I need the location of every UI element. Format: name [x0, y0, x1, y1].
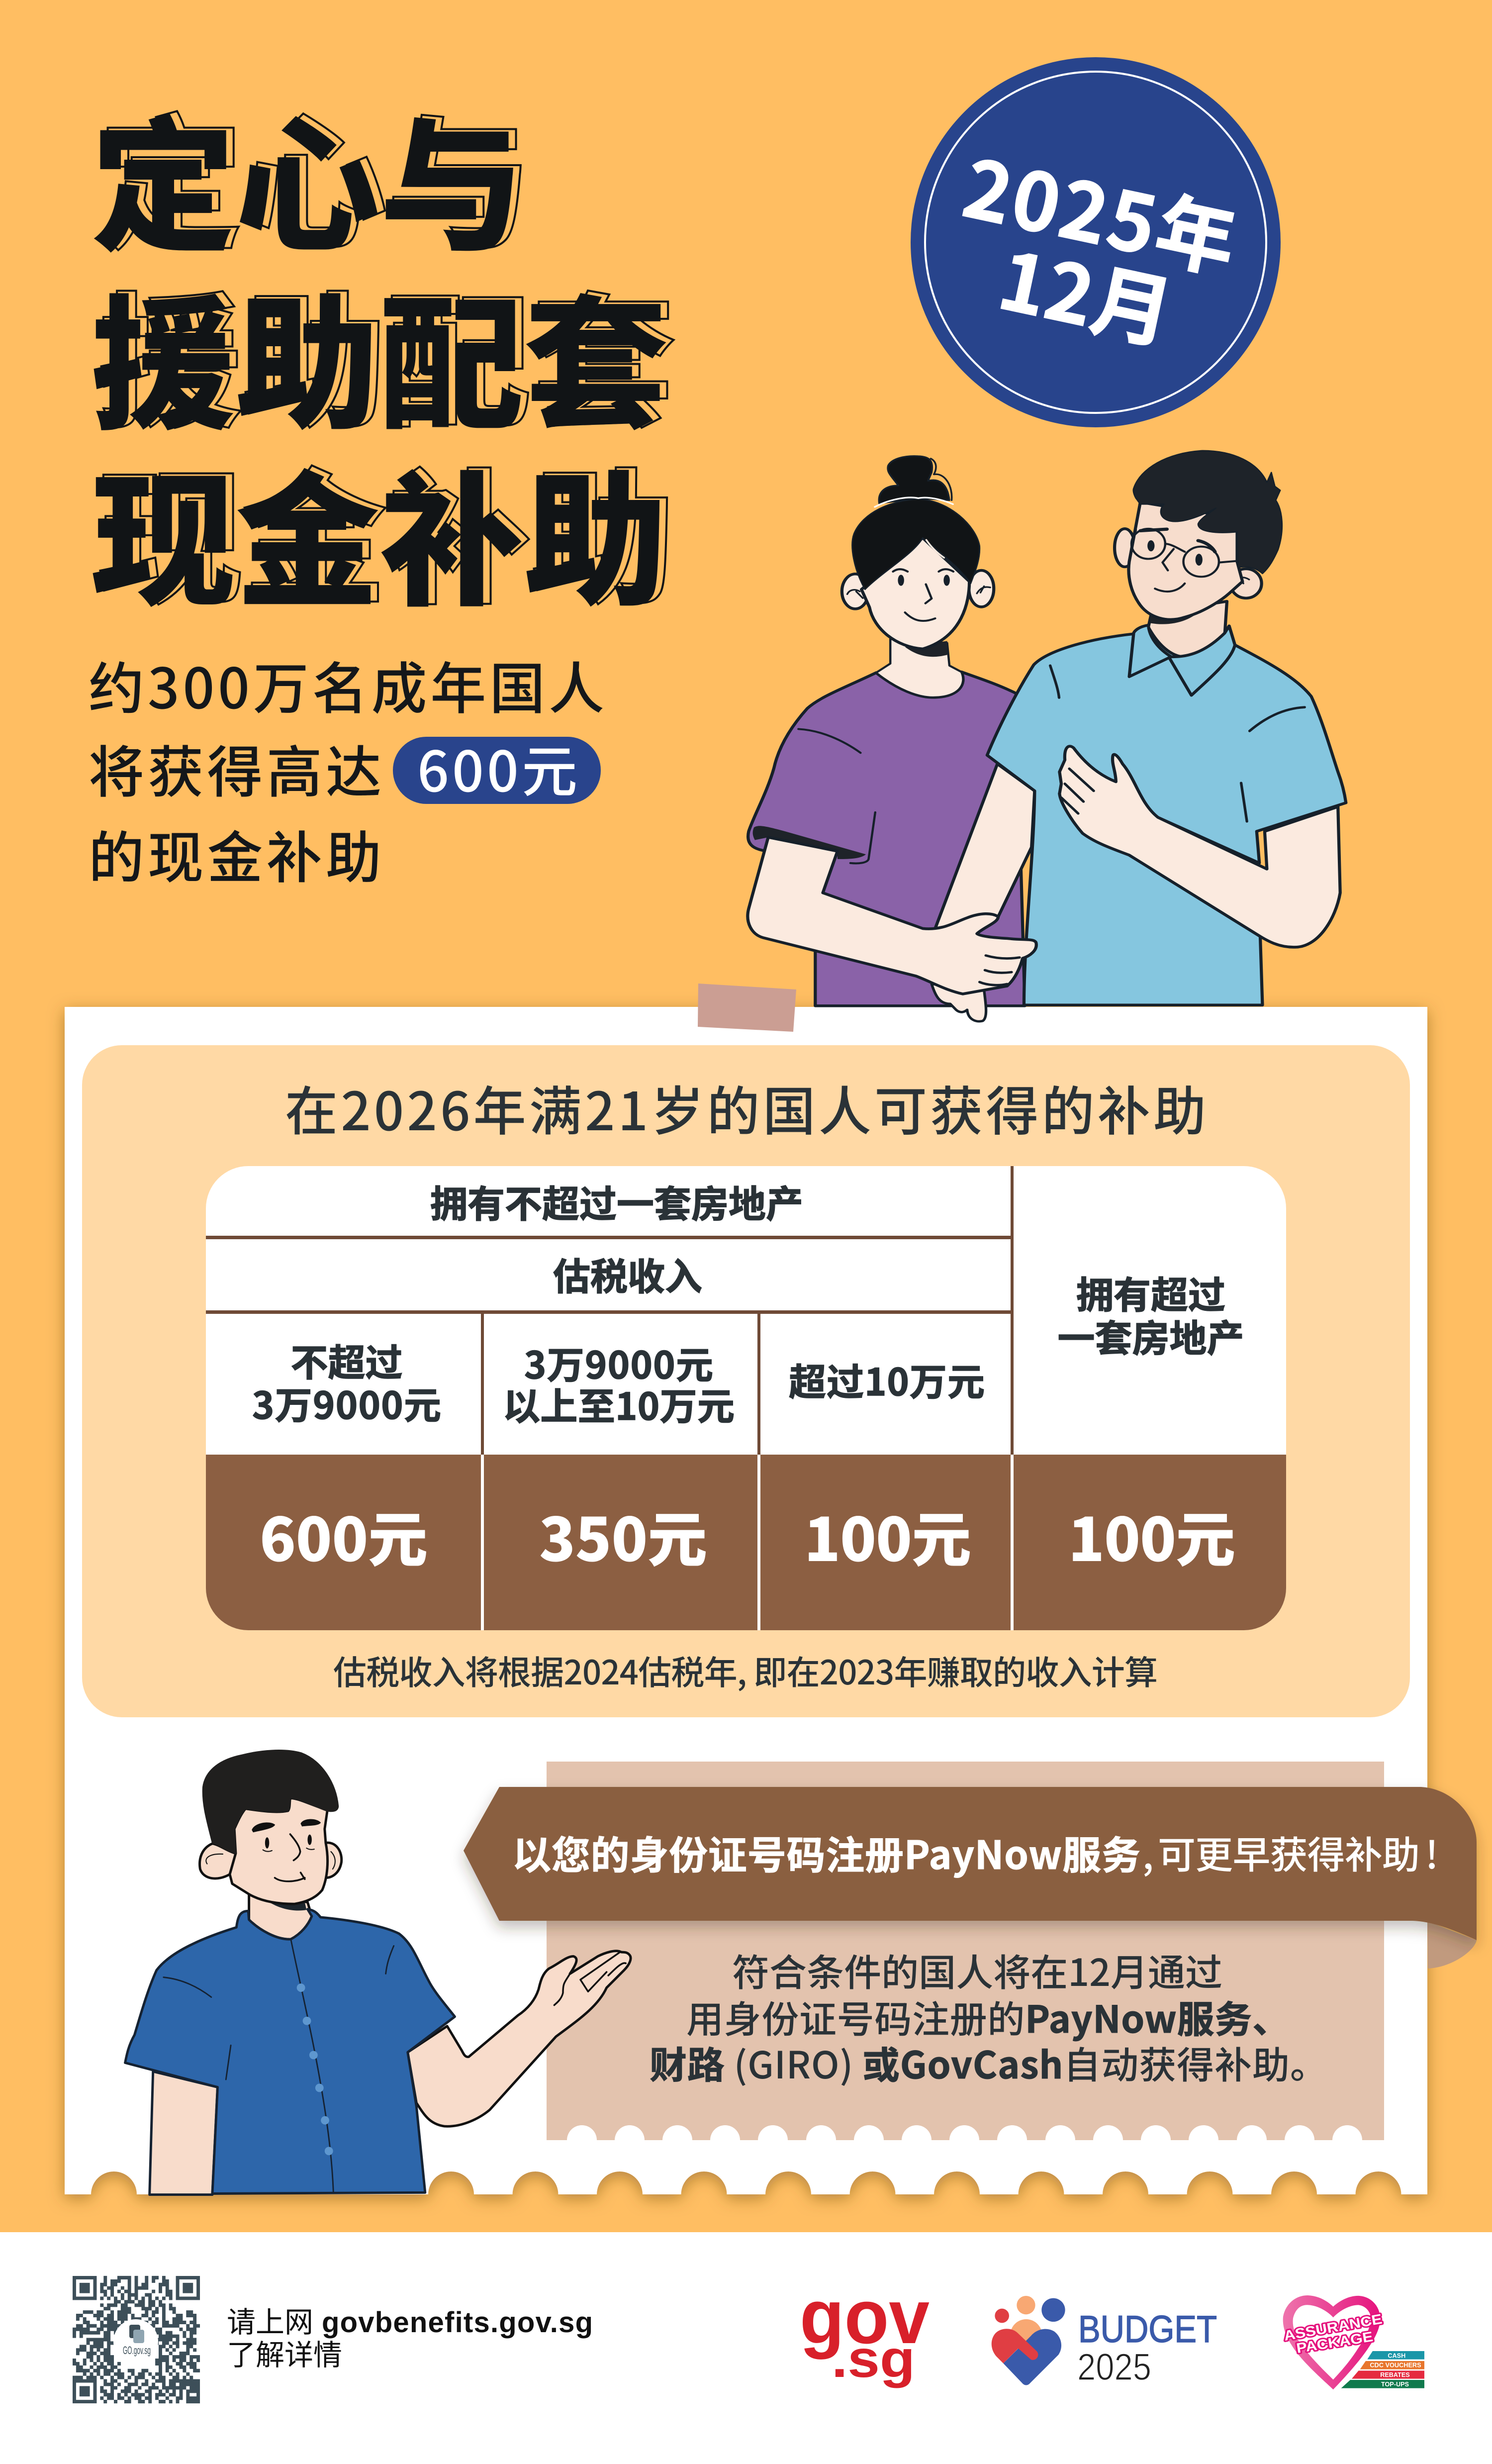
- assurance wordmark: ASSURANCE: [1283, 2311, 1383, 2344]
- footer strip: [0, 2232, 1492, 2464]
- amount pill: 600元: [417, 727, 577, 808]
- title solid text: 援助配套: [91, 249, 668, 458]
- woman face: [861, 538, 969, 649]
- woman features: [898, 575, 904, 586]
- woman fingers: [932, 984, 986, 1021]
- table header labels: 一套房地产: [1057, 1308, 1244, 1363]
- woman finger lines: [980, 956, 1020, 985]
- title solid text: [91, 72, 668, 635]
- table header labels: 超过10万元: [789, 1352, 985, 1406]
- title offset outline: 援助配套: [98, 247, 675, 456]
- budget wordmark: BUDGET: [1078, 2308, 1217, 2351]
- shirt buttons: [297, 1983, 333, 2155]
- hair: [203, 1750, 338, 1854]
- woman shirt creases: [798, 729, 875, 863]
- table header labels: 估税收入: [553, 1247, 702, 1301]
- title offset outline: 定心与: [98, 69, 531, 278]
- title offset outline: 现金补助: [98, 423, 675, 632]
- assurance category bars: CASH: [1388, 2352, 1405, 2359]
- logo: Budget 2025: [992, 2296, 1217, 2388]
- face: [230, 1798, 328, 1904]
- ribbon body: [464, 1787, 1477, 1940]
- QR centre logo: GO.gov.sg: [123, 2344, 151, 2357]
- ribbon text: 以您的身份证号码注册PayNow服务: [512, 1825, 1140, 1880]
- man collar: [1129, 625, 1235, 695]
- man blue shirt: [987, 625, 1346, 1005]
- pointing arm and hand: [408, 1951, 631, 2126]
- table header labels: 拥有超过: [1076, 1265, 1225, 1319]
- table amounts: [260, 1492, 1235, 1578]
- date badge: [911, 57, 1281, 427]
- subtitle: [89, 644, 604, 894]
- assurance category bars: REBATES: [1380, 2371, 1410, 2378]
- footer link text: [227, 2299, 593, 2373]
- subtitle: 约300万名成年国人: [89, 644, 604, 725]
- tape: [698, 984, 796, 1032]
- table panel: [82, 1045, 1410, 1717]
- table amounts: 350元: [539, 1492, 707, 1578]
- title: [91, 69, 675, 635]
- table amounts: 600元: [260, 1492, 428, 1578]
- woman head: [842, 456, 994, 697]
- left arm: [150, 2071, 217, 2195]
- man in blue shirt: [125, 1750, 631, 2195]
- man face: [1128, 502, 1242, 619]
- table header labels: 3万9000元: [524, 1335, 713, 1389]
- woman bun: [879, 456, 949, 503]
- man hair: [1133, 451, 1282, 574]
- woman purple shirt: [748, 672, 1025, 1006]
- man neck: [1148, 601, 1227, 657]
- woman neck: [876, 639, 963, 697]
- ribbon fold: [1427, 1921, 1477, 1969]
- woman sleeve cuff: [753, 826, 866, 859]
- info text: 财路 (GIRO) 或GovCash自动获得补助。: [650, 2035, 1327, 2089]
- subsidy table: [206, 1166, 1286, 1630]
- table header labels: 3万9000元: [252, 1376, 441, 1430]
- date badge: 2025年: [954, 125, 1248, 295]
- date badge: 12月: [990, 217, 1184, 366]
- logo: gov.sg: gov: [800, 2273, 930, 2360]
- footer link text: 请上网: [227, 2299, 313, 2341]
- QR code: [73, 2277, 200, 2402]
- info box: [547, 1762, 1384, 2140]
- man finger lines and shirt creases: [1050, 666, 1305, 821]
- ribbon banner: [464, 1787, 1477, 1969]
- man features: [1147, 540, 1154, 551]
- assurance heart: [1283, 2295, 1380, 2389]
- title solid text: 定心与: [91, 72, 524, 281]
- assurance wordmark: [1283, 2311, 1383, 2356]
- table header labels: 以上至10万元: [503, 1377, 735, 1431]
- couple illustration: [747, 451, 1346, 1021]
- title solid text: 现金补助: [91, 426, 668, 635]
- logo: Assurance Package: [1283, 2295, 1424, 2389]
- table header labels: 拥有不超过一套房地产: [430, 1174, 803, 1228]
- assurance category bars: TOP-UPS: [1381, 2381, 1409, 2388]
- table header labels: 不超过: [290, 1333, 403, 1387]
- man right arm: [935, 764, 1034, 928]
- assurance wordmark: PACKAGE: [1295, 2329, 1374, 2356]
- ribbon text: !: [1425, 1825, 1438, 1879]
- man left arm and hand: [1059, 746, 1340, 947]
- table amounts: 100元: [1068, 1492, 1235, 1578]
- subtitle: 将获得高达: [89, 728, 381, 808]
- logo: Budget 2025: 2025: [1077, 2346, 1151, 2388]
- blue shirt: [125, 1909, 455, 2193]
- footer link text: 了解详情: [227, 2332, 342, 2373]
- man ears: [1115, 529, 1135, 567]
- QR data modules: [73, 2277, 200, 2402]
- assurance category bars: [1341, 2351, 1424, 2388]
- QR finder patterns: [74, 2277, 198, 2402]
- assurance category bars: CDC VOUCHERS: [1370, 2362, 1421, 2369]
- woman arm and hand: [747, 837, 1036, 994]
- paper sheet: [65, 1007, 1427, 2194]
- budget heart icon: [992, 2296, 1065, 2385]
- info text: [650, 1943, 1327, 2089]
- info text: 符合条件的国人将在12月通过: [732, 1943, 1222, 1997]
- table footnote: 估税收入将根据2024估税年, 即在2023年赚取的收入计算: [333, 1646, 1158, 1694]
- woman hair: [852, 499, 980, 590]
- man head: [1115, 451, 1282, 695]
- logo: gov.sg: .sg: [832, 2330, 915, 2388]
- ears: [200, 1844, 236, 1878]
- ribbon text: [512, 1825, 1438, 1880]
- table amounts: 100元: [804, 1492, 971, 1578]
- man glasses: [1131, 529, 1165, 559]
- panel heading: 在2026年满21岁的国人可获得的补助: [285, 1069, 1206, 1146]
- shirt placket and creases: [164, 1939, 394, 2192]
- facial features: [206, 1819, 335, 1881]
- info text: 用身份证号码注册的PayNow服务、: [686, 1989, 1290, 2044]
- footer link text: govbenefits.gov.sg: [322, 2306, 593, 2339]
- neck: [249, 1893, 312, 1939]
- ribbon text: ,: [1142, 1825, 1154, 1880]
- subtitle: 的现金补助: [89, 813, 381, 894]
- ribbon text: 可更早获得补助: [1158, 1825, 1420, 1879]
- table header labels: [252, 1174, 1244, 1431]
- title offset outline: [98, 69, 675, 632]
- QR centre logo: [113, 2319, 158, 2364]
- woman ears: [842, 574, 868, 609]
